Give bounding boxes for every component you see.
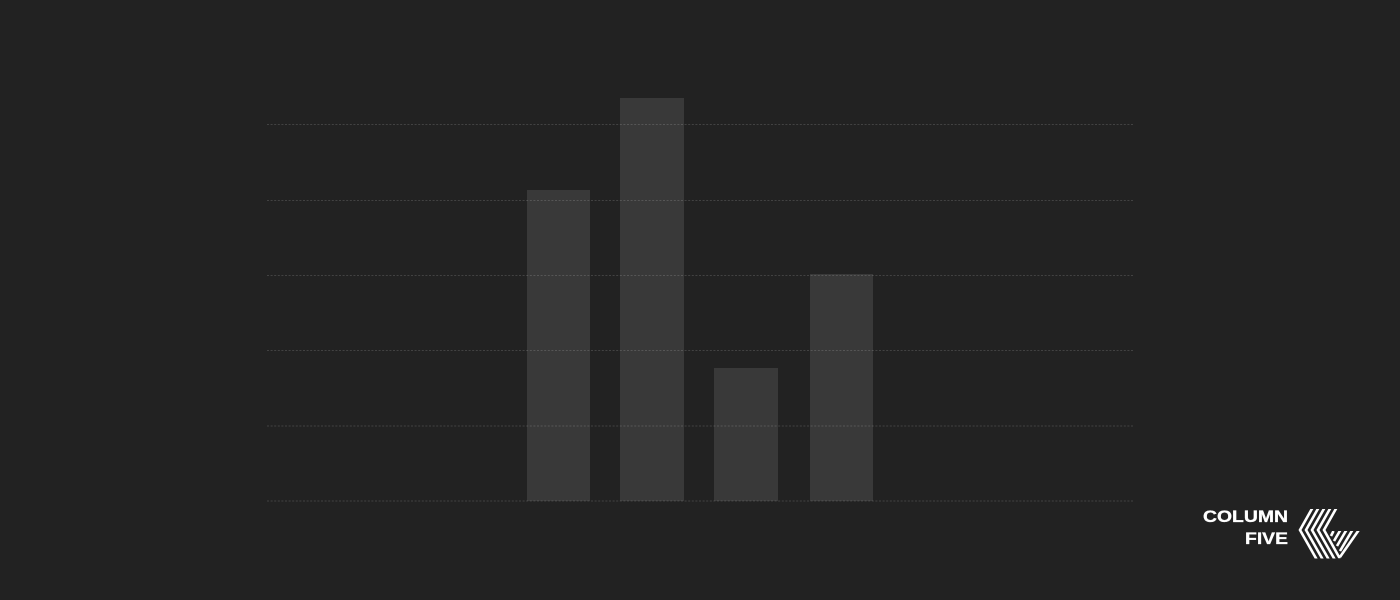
bar chart [267, 98, 1133, 501]
logo wordmark: FIVE [1245, 529, 1288, 548]
bar 3 [714, 368, 778, 501]
bar 4 [810, 274, 873, 501]
bar 2 [620, 98, 684, 501]
logo wordmark: COLUMN [1203, 507, 1288, 526]
logo: Column Five [1203, 506, 1360, 560]
logo mark: striped chevrons [1300, 506, 1360, 560]
infographic canvas [267, 98, 1360, 558]
bar 1 [527, 190, 590, 501]
logo wordmark [1203, 507, 1288, 548]
